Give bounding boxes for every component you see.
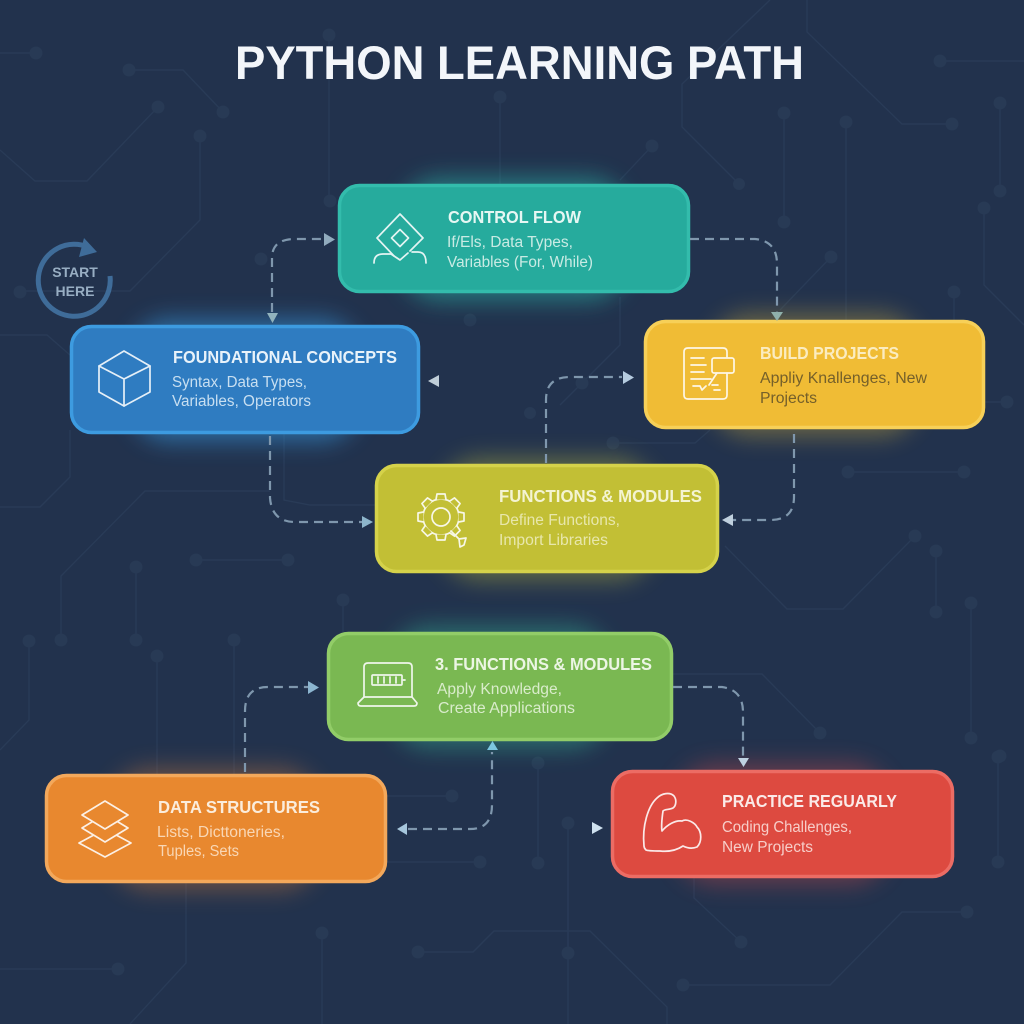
body: build projects [760,370,928,407]
body: practice regularly: Coding Challenges, [722,819,852,836]
body: build projects: Projects [760,390,817,407]
heading: control flow: CONTROL FLOW [448,207,581,227]
arrow: functions to build projects [546,371,634,463]
arrow: data structures back to green panel [397,741,498,835]
body: apply functions and modules [437,681,575,717]
body: apply functions and modules: Apply Knowledge, [437,681,562,698]
heading: apply functions and modules: 3. FUNCTIONS & MODULES [435,654,652,674]
panel: foundational concepts [72,319,418,441]
heading: build projects: BUILD PROJECTS [760,343,899,363]
heading: data structures: DATA STRUCTURES [158,797,320,817]
body: data structures: Tuples, Sets [158,843,239,860]
arrow: pointer left to foundational [428,375,439,387]
title: PYTHON LEARNING PATH [235,36,804,89]
heading: functions and modules: FUNCTIONS & MODULES [499,486,702,506]
arrow: build projects to functions [722,434,794,526]
body: control flow: Variables (For, While) [447,254,593,271]
heading: foundational concepts: FOUNDATIONAL CONCEPTS [173,347,397,367]
body: build projects: Appliy Knallenges, New [760,370,928,387]
body: practice regularly [722,819,852,856]
body: foundational concepts: Variables, Operators [172,393,311,410]
arrow: pointer right to practice [592,822,603,834]
body: functions and modules [499,512,620,549]
panel: control flow [340,178,688,300]
panel: practice regularly [612,764,952,884]
start here badge: START [52,264,98,280]
body: foundational concepts [172,374,311,410]
body: apply functions and modules: Create Applications [438,700,575,717]
panel: build projects [646,314,984,436]
body: functions and modules: Import Libraries [499,532,608,549]
body: control flow [447,234,593,271]
icon: gear with key [418,494,466,547]
arrow: data structures to green panel [245,681,319,772]
icon: project document [684,348,734,399]
icon: layers [79,801,131,857]
heading: practice regularly: PRACTICE REGUARLY [722,791,897,811]
icon: laptop [358,663,417,706]
panel: apply functions and modules [328,626,672,748]
arrow: foundational to control flow [267,233,335,323]
start here badge: HERE [56,283,94,299]
icon: flexed arm [644,794,701,851]
body: control flow: If/Els, Data Types, [447,234,573,251]
arrow: green panel to practice [673,687,749,767]
arrow: foundational to functions [270,436,373,528]
icon: decision diamond [374,214,426,263]
body: functions and modules: Define Functions, [499,512,620,529]
arrow: control flow to build projects [690,239,783,321]
icon: cube [99,351,150,406]
panel: functions and modules [376,458,718,580]
body: practice regularly: New Projects [722,839,813,856]
panel: data structures [46,768,386,890]
body: foundational concepts: Syntax, Data Types, [172,374,307,391]
start here badge [38,238,110,316]
body: data structures: Lists, Dicttoneries, [157,824,285,841]
body: data structures [157,824,285,860]
